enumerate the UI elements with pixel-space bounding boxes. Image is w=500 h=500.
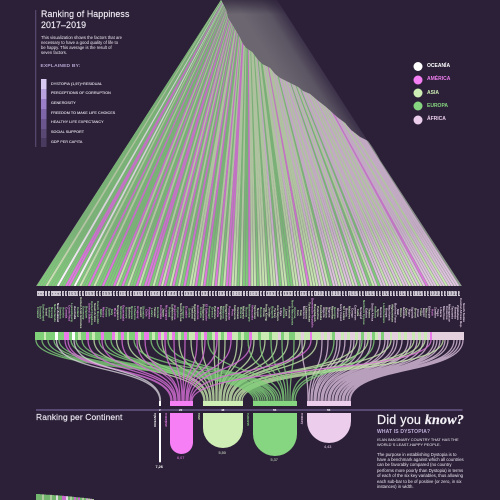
factor labels bbox=[51, 82, 116, 144]
country names row: Japan bbox=[162, 308, 166, 317]
country names row: Poland bbox=[167, 307, 171, 318]
country names row: Nigeria bbox=[328, 307, 332, 318]
country names row: Dominican Republic bbox=[310, 298, 314, 327]
country names row: Mongolia bbox=[219, 306, 223, 319]
continent average values bbox=[156, 445, 332, 469]
country names row: Uruguay bbox=[136, 306, 140, 319]
country names row: Azerbaijan bbox=[276, 305, 280, 320]
country names row: Madagascar bbox=[448, 304, 452, 321]
dystopia explanation: have a benchmark against which all countries bbox=[377, 457, 464, 462]
intro text: This visualization shows the factors that are bbox=[41, 34, 122, 40]
country names row: Georgia bbox=[333, 307, 337, 318]
flows: África bbox=[302, 340, 463, 401]
country names row: Kenya bbox=[385, 308, 389, 317]
country names row: Comoros bbox=[445, 306, 449, 319]
country names row: Bangladesh bbox=[313, 304, 317, 321]
intro text: necessary to have a good quality of life to bbox=[41, 40, 118, 45]
title: 2017–2019 bbox=[41, 20, 86, 30]
title bbox=[41, 9, 130, 30]
continent legend labels bbox=[427, 62, 450, 122]
country names row: United States bbox=[87, 303, 91, 322]
country names row: Peru bbox=[230, 309, 234, 316]
country names row: Thailand bbox=[190, 306, 194, 319]
bottom cut-off bar chart bbox=[37, 494, 93, 500]
flow curves from countries to continents bbox=[36, 340, 463, 401]
country names row: Ghana bbox=[336, 308, 340, 317]
country names row: Canada bbox=[64, 307, 68, 318]
country names row: Uzbekistan bbox=[170, 304, 174, 321]
country names row: New Zealand bbox=[56, 303, 60, 322]
continent average values: 4,43 bbox=[324, 445, 331, 449]
country names row: Guatemala bbox=[122, 305, 126, 320]
country names row: Venezuela bbox=[250, 305, 254, 320]
country names row: Finland bbox=[36, 307, 40, 318]
vertical continent names: EUROPA bbox=[246, 413, 250, 426]
country names row: Latvia bbox=[150, 308, 154, 317]
country names row: Slovakia bbox=[142, 306, 146, 319]
country names row: United Arab Emirates bbox=[79, 297, 83, 328]
country names row: South Africa bbox=[370, 303, 374, 322]
country names row: Malaysia bbox=[242, 306, 246, 319]
score colour band bbox=[35, 332, 464, 340]
country names row: Timor bbox=[419, 308, 423, 317]
explained by heading: EXPLAINED BY: bbox=[40, 64, 81, 69]
country names row: Cameroon bbox=[353, 305, 357, 320]
country names row: El Salvador bbox=[205, 304, 209, 321]
factor labels: FREEDOM TO MAKE LIFE CHOICES bbox=[51, 111, 115, 115]
country names row: Tanzania bbox=[450, 306, 454, 319]
country names row: Libya bbox=[279, 308, 283, 317]
country names row: Afghanistan bbox=[390, 304, 394, 321]
country names row: Mauritania bbox=[388, 305, 392, 320]
country names row: Andorra bbox=[373, 306, 377, 319]
country names row: Egypt bbox=[422, 308, 426, 317]
continent counts on divider: 55 bbox=[327, 408, 330, 412]
continent counts on divider: 2 bbox=[159, 408, 161, 412]
intro text bbox=[41, 34, 122, 55]
country names row: Lebanon bbox=[305, 306, 309, 319]
country names row: Iraq bbox=[299, 310, 303, 315]
country names row: Sweden bbox=[59, 307, 63, 318]
country names row: Iceland bbox=[47, 307, 51, 318]
country names row: Panama bbox=[147, 307, 151, 318]
country names row: Macau bbox=[425, 308, 429, 317]
country names row: Syria bbox=[376, 309, 380, 316]
bar: Oceanía bbox=[159, 401, 161, 462]
country names row: Turkey bbox=[273, 308, 277, 317]
dystopia explanation: instances) in width. bbox=[377, 484, 414, 489]
continent average values: 5,37 bbox=[270, 458, 278, 462]
country names row: Nicaragua bbox=[165, 305, 169, 320]
country names row: Myanmar bbox=[330, 306, 334, 319]
country names row: Cambodia bbox=[319, 305, 323, 320]
country names row: China bbox=[262, 308, 266, 317]
country names row: Jordan bbox=[267, 307, 271, 318]
country names row: Mali bbox=[396, 309, 400, 316]
country names row: Niger bbox=[408, 309, 412, 316]
what is dystopia subheading: WHAT IS DYSTOPIA? bbox=[377, 429, 430, 435]
country names row: Bahrain bbox=[127, 307, 131, 318]
country names row: Bulgaria bbox=[270, 306, 274, 319]
country names row: Congo bbox=[350, 308, 354, 317]
country names row: Burkina Faso bbox=[393, 303, 397, 322]
continent bars bbox=[159, 401, 351, 462]
country names row: India bbox=[356, 309, 360, 316]
country names row: Chile bbox=[145, 309, 149, 316]
country names row: Zambia bbox=[433, 307, 437, 318]
country names row: Qatar bbox=[405, 308, 409, 317]
country names row: Montenegro bbox=[247, 304, 251, 321]
country names row: Honduras bbox=[196, 305, 200, 320]
country names row: Gambia bbox=[402, 307, 406, 318]
country names row: Hong Kong bbox=[265, 304, 269, 321]
country names row: Moldova bbox=[222, 306, 226, 319]
continent legend labels: ASIA bbox=[427, 90, 439, 96]
country names row: Pakistan bbox=[213, 306, 217, 319]
vertical continent names bbox=[152, 413, 304, 427]
country names row: Morocco bbox=[302, 306, 306, 319]
country names row: Maldives bbox=[348, 306, 352, 319]
country names row: Norway bbox=[50, 307, 54, 318]
country names row: Tajikistan bbox=[253, 305, 257, 320]
dystopia explanation: performs more poorly than Dystopia) in terms bbox=[377, 468, 463, 473]
country names row: Saudi Arabia bbox=[93, 303, 97, 322]
country names row: Switzerland bbox=[42, 304, 46, 321]
country names row: Lithuania bbox=[133, 306, 137, 319]
bar: Europa bbox=[253, 401, 297, 456]
country names row: Greece bbox=[210, 307, 214, 318]
country names row: Belarus bbox=[239, 307, 243, 318]
country names row: Taiwan bbox=[153, 307, 157, 318]
country names row: Ukraine bbox=[293, 307, 297, 318]
dystopia definition bbox=[377, 436, 459, 446]
country names row: Colombia bbox=[159, 305, 163, 320]
vertical continent names: AMÉRICA bbox=[164, 413, 168, 427]
dystopia explanation bbox=[377, 452, 464, 489]
country names row: Netherlands bbox=[53, 304, 57, 321]
country names row: Gabon bbox=[365, 308, 369, 317]
country names row: Togo bbox=[436, 309, 440, 316]
dystopia explanation: each sub-bar to be of positive (or zero, in six bbox=[377, 479, 462, 484]
continent counts on divider: 55 bbox=[273, 408, 276, 412]
country names row: Ivory Coast bbox=[339, 304, 343, 321]
continent average values: 5,50 bbox=[218, 451, 226, 455]
country names row: Kazakhstan bbox=[193, 304, 197, 321]
vertical continent names: OCEANÍA bbox=[152, 413, 156, 427]
country names row: Senegal bbox=[359, 307, 363, 318]
country names row: Zimbabwe bbox=[456, 305, 460, 320]
country names row: Israel bbox=[44, 308, 48, 317]
factor labels: HEALTHY LIFE EXPECTANCY bbox=[51, 120, 104, 124]
dystopia definition: WORLD´S LEAST-HAPPY PEOPLE. bbox=[377, 442, 441, 446]
factor labels: SOCIAL SUPPORT bbox=[51, 130, 84, 134]
country names row: Albania bbox=[282, 307, 286, 318]
dystopia explanation: The purpose in establishing Dystopia is to bbox=[377, 452, 457, 457]
country names row: Russia bbox=[245, 307, 249, 318]
country names row: Sri Lanka bbox=[342, 306, 346, 319]
country names row: United Kingdom bbox=[90, 301, 94, 324]
country names row: Brunei bbox=[413, 308, 417, 317]
country names row bbox=[36, 297, 466, 328]
country names row: Indonesia bbox=[233, 305, 237, 320]
intro text: be happy. This average is the result of bbox=[41, 45, 112, 50]
country names row: Brazil bbox=[113, 308, 117, 317]
country names row: Liechtenstein bbox=[382, 303, 386, 322]
country names row: Luxembourg bbox=[70, 303, 74, 322]
country names row: Serbia bbox=[187, 308, 191, 317]
dystopia definition: IS AN IMAGINARY COUNTRY THAT HAS THE bbox=[377, 436, 459, 442]
country names row: Kyrgyzstan bbox=[225, 304, 229, 321]
country names row: Mauritius bbox=[442, 306, 446, 319]
factor labels: DYSTOPIA (1,97)+RESIDUAL bbox=[51, 82, 102, 86]
left vertical rule bbox=[35, 10, 36, 147]
country names row: Ireland bbox=[76, 307, 80, 318]
coloured country stripes bbox=[36, 0, 462, 286]
dystopia explanation: of each of the six key variables, thus allowing bbox=[377, 473, 463, 478]
country names row: Slovenia bbox=[119, 306, 123, 319]
country names row: Benin bbox=[345, 308, 349, 317]
factor labels: PERCEPTIONS OF CORRUPTION bbox=[51, 91, 111, 95]
country names row: Haiti bbox=[430, 309, 434, 316]
country names row: Ecuador bbox=[185, 306, 189, 319]
country names row: Australia bbox=[73, 306, 77, 319]
flows: Oceanía bbox=[56, 340, 160, 401]
country names row: Iran bbox=[296, 310, 300, 315]
country names row: Algeria bbox=[322, 307, 326, 318]
flows: Europa bbox=[36, 340, 374, 401]
continent average values: 6,07 bbox=[177, 456, 184, 460]
country names row: Philippines bbox=[202, 304, 206, 321]
country names row: Austria bbox=[62, 307, 66, 318]
continent legend labels: EUROPA bbox=[427, 103, 448, 109]
continent counts on divider bbox=[159, 408, 330, 412]
flows: Asia bbox=[94, 340, 443, 401]
grey remainder of the fan bbox=[221, 0, 380, 160]
title: Ranking of Happiness bbox=[41, 9, 129, 19]
country names row: Yemen bbox=[368, 308, 372, 317]
factor labels: GENEROSITY bbox=[51, 101, 76, 105]
country names row: Oman bbox=[399, 308, 403, 317]
country names row: Vietnam bbox=[236, 306, 240, 318]
country names row: Armenia bbox=[287, 306, 291, 319]
vertical continent names: ASIA bbox=[197, 413, 201, 420]
continent counts on divider: 22 bbox=[179, 408, 182, 412]
bar: África bbox=[307, 401, 351, 443]
country names row: Argentina bbox=[173, 305, 177, 320]
country names row: Croatia bbox=[199, 307, 203, 318]
continent legend labels: ÁFRICA bbox=[427, 116, 446, 122]
country names row: Estonia bbox=[156, 307, 160, 318]
continent legend labels: OCEANÍA bbox=[427, 63, 450, 69]
country names row: Spain bbox=[107, 308, 111, 317]
vertical continent names: ÁFRICA bbox=[300, 413, 304, 424]
bar: Asia bbox=[203, 401, 243, 448]
country names row: South Korea bbox=[179, 303, 183, 322]
country names row: Denmark bbox=[39, 306, 43, 319]
legend gradient scale bbox=[41, 79, 46, 147]
country names row: Portugal bbox=[207, 306, 211, 319]
flows: América bbox=[65, 340, 431, 401]
country names row: Cyprus bbox=[176, 307, 180, 318]
country names row: Paraguay bbox=[227, 306, 231, 319]
country names row: South Sudan bbox=[462, 303, 466, 322]
intro text: seven factors. bbox=[41, 50, 67, 55]
country names row: Costa Rica bbox=[67, 304, 71, 320]
country names row: North Macedonia bbox=[290, 300, 294, 325]
country names row: Chad bbox=[416, 309, 420, 316]
country names row: Uganda bbox=[410, 307, 414, 318]
country names row: Northern Cyprus bbox=[362, 300, 366, 325]
country names row: Czech Republic bbox=[96, 301, 100, 324]
country names row: Belgium bbox=[84, 306, 88, 319]
country names row: Romania bbox=[130, 306, 134, 319]
country names row: Central African Rep. bbox=[459, 298, 463, 327]
continent legend dots bbox=[414, 62, 422, 124]
country names row: Liberia bbox=[439, 307, 443, 318]
factor labels: GDP PER CAPITA bbox=[51, 140, 82, 144]
country names row: Malta bbox=[99, 309, 103, 316]
country names row: Italy bbox=[110, 309, 114, 316]
country names row: Nepal bbox=[256, 308, 260, 317]
section heading: ranking per continent: Ranking per Continent bbox=[36, 412, 122, 422]
bar: América bbox=[170, 401, 193, 454]
country names row: Kosovo bbox=[124, 307, 128, 318]
did you know heading: Did you know? bbox=[377, 412, 464, 428]
country names row: Mexico bbox=[102, 307, 106, 318]
country names row: Palestine bbox=[316, 306, 320, 319]
country names row: France bbox=[104, 307, 108, 318]
continent counts on divider: 48 bbox=[221, 408, 224, 412]
country names row: Bosnia bbox=[259, 307, 263, 318]
rank numbers row bbox=[37, 291, 460, 296]
country names row: Bhutan bbox=[325, 307, 329, 318]
country names row: Ethiopia bbox=[428, 306, 432, 319]
continent legend labels: AMÉRICA bbox=[427, 76, 450, 82]
dystopia explanation: can be favorably compared (no country bbox=[377, 462, 452, 467]
country names row: Singapore bbox=[116, 305, 120, 320]
country names row: Turkmenistan bbox=[308, 302, 312, 323]
country names row: Laos bbox=[285, 309, 289, 316]
divider line bbox=[36, 409, 462, 411]
country names row: Bolivia bbox=[216, 307, 220, 318]
country names row: Hungary bbox=[182, 306, 186, 319]
country names row: Kuwait bbox=[139, 307, 143, 318]
country names row: Rwanda bbox=[453, 307, 457, 318]
country names row: Germany bbox=[82, 306, 86, 319]
country names row: Guinea bbox=[379, 307, 383, 318]
continent average values: 7,26 bbox=[156, 465, 163, 469]
